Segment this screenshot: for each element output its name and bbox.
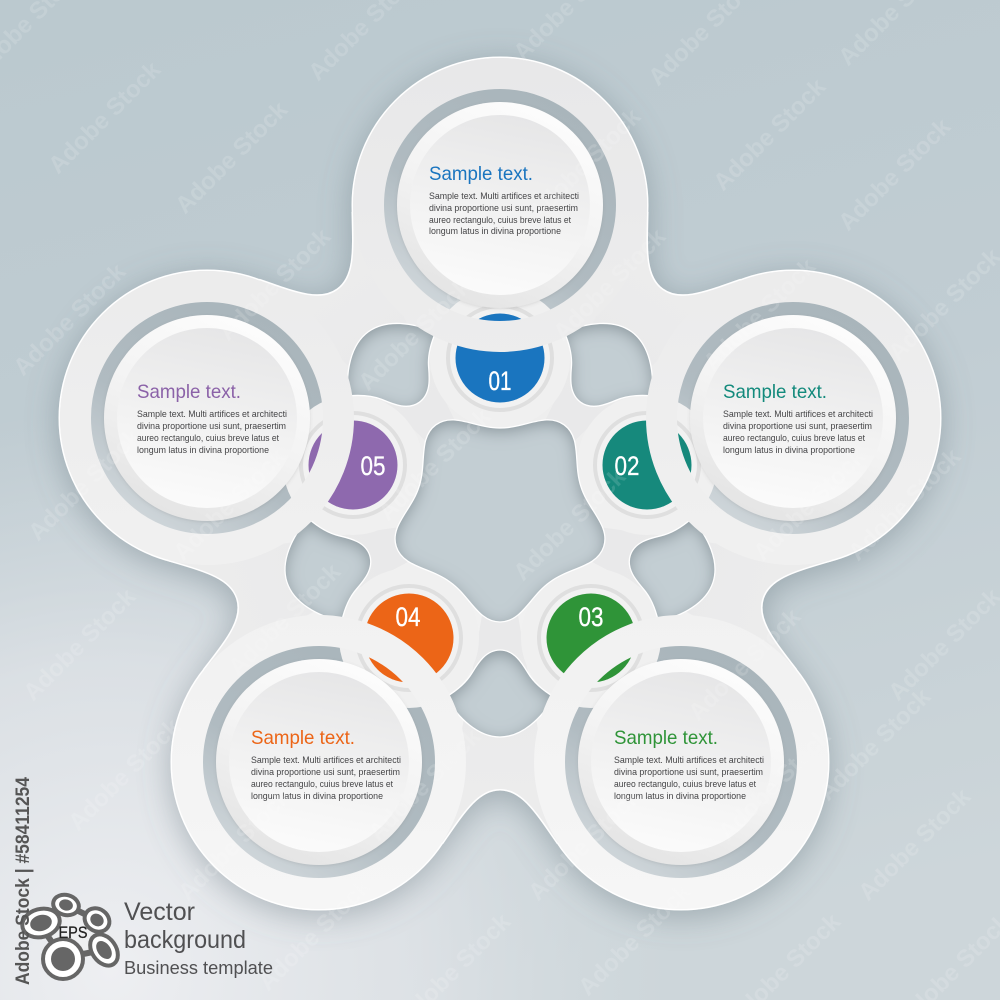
caption: vector background business template: Vector — [124, 898, 195, 926]
panel: step 5: Sample text. — [137, 381, 241, 403]
watermarks: Adobe Stock — [63, 713, 187, 836]
logo icon with EPS label: EPS — [58, 923, 88, 942]
logo icon with EPS label — [19, 892, 124, 979]
panel: step 4: Sample text. Multi artifices et architecti — [251, 755, 401, 765]
watermarks: Adobe Stock — [18, 583, 142, 706]
panel: step 5: longum latus in divina proportione — [137, 445, 269, 455]
watermarks: Adobe Stock — [843, 443, 967, 566]
watermarks: Adobe Stock — [170, 96, 294, 219]
panel: step 2: longum latus in divina proportione — [723, 445, 855, 455]
watermarks: Adobe Stock — [523, 103, 647, 226]
caption: vector background business template: Business template — [124, 957, 273, 978]
watermarks: Adobe Stock — [223, 558, 347, 681]
panel: step 1: Sample text. — [429, 163, 533, 185]
caption: vector background business template — [124, 898, 273, 978]
badge 01: 01 — [488, 366, 512, 396]
panel: step 3 — [550, 630, 812, 894]
panel: step 5: aureo rectangulo, cuius breve latus et — [137, 433, 279, 443]
badge 03 — [521, 568, 661, 708]
panel: step 1: divina proportione usi sunt, praesertim — [429, 203, 578, 213]
watermarks: Adobe Stock — [573, 878, 697, 1000]
panel: step 2: divina proportione usi sunt, praesertim — [723, 421, 872, 431]
central white shape — [60, 58, 940, 909]
watermarks: Adobe Stock — [683, 603, 807, 726]
panel: step 4: aureo rectangulo, cuius breve latus et — [251, 779, 393, 789]
watermarks: Adobe Stock — [23, 423, 147, 546]
watermarks: Adobe Stock — [173, 783, 297, 906]
panel: step 3: Sample text. — [614, 727, 718, 749]
badge 04 — [339, 568, 479, 708]
panel: step 3: divina proportione usi sunt, praesertim — [614, 767, 763, 777]
recessed grey rings — [90, 88, 910, 879]
panel: step 3: Sample text. Multi artifices et architecti — [614, 755, 764, 765]
watermarks: Adobe Stock — [698, 253, 822, 376]
watermarks: Adobe Stock — [833, 113, 957, 236]
panel: step 5: Sample text. Multi artifices et architecti — [137, 409, 287, 419]
panel: step 4: longum latus in divina proportione — [251, 791, 383, 801]
watermarks: Adobe Stock — [213, 223, 337, 346]
panel: step 3: longum latus in divina proportione — [614, 791, 746, 801]
panel: step 1 — [368, 74, 632, 336]
panel: step 1: aureo rectangulo, cuius breve latus et — [429, 215, 571, 225]
badge 02 — [577, 395, 717, 535]
badge 04: 04 — [396, 602, 420, 632]
watermarks: Adobe Stock — [508, 463, 632, 586]
watermarks: Adobe Stock — [363, 723, 487, 846]
panel: step 4: Sample text. — [251, 727, 355, 749]
panel: step 1: Sample text. Multi artifices et architecti — [429, 191, 579, 201]
watermarks: Adobe Stock — [43, 56, 167, 179]
panel: step 2 — [662, 286, 924, 550]
watermarks: Adobe Stock — [168, 443, 292, 566]
watermarks: Adobe Stock — [748, 443, 872, 566]
watermarks: Adobe Stock — [813, 683, 937, 806]
panel: step 4: divina proportione usi sunt, praesertim — [251, 767, 400, 777]
panel: step 2: aureo rectangulo, cuius breve latus et — [723, 433, 865, 443]
watermarks: Adobe Stock — [253, 873, 377, 996]
watermarks: Adobe Stock — [708, 73, 832, 196]
watermarks: Adobe Stock — [8, 258, 132, 381]
panel: step 3: aureo rectangulo, cuius breve latus et — [614, 779, 756, 789]
vertical stock id: Adobe Stock | #58411254 — [13, 777, 34, 985]
watermarks: Adobe Stock — [548, 223, 672, 346]
watermarks: Adobe Stock — [353, 273, 477, 396]
cut-out holes — [270, 300, 730, 737]
badge 05: 05 — [360, 451, 386, 481]
watermarks: Adobe Stock — [523, 783, 647, 906]
watermarks: Adobe Stock — [713, 723, 837, 846]
caption: vector background business template: background — [124, 926, 246, 954]
panel: step 4 — [188, 630, 450, 894]
badge 01 — [430, 288, 570, 428]
panel: step 2: Sample text. Multi artifices et architecti — [723, 409, 873, 419]
panel: step 1: longum latus in divina proportione — [429, 226, 561, 236]
badge 03: 03 — [578, 602, 604, 632]
watermarks: Adobe Stock — [373, 403, 497, 526]
panel: step 5: divina proportione usi sunt, praesertim — [137, 421, 286, 431]
panel: step 2: Sample text. — [723, 381, 827, 403]
watermarks: Adobe Stock — [853, 783, 977, 906]
panel: step 5 — [76, 286, 338, 550]
badge 02: 02 — [614, 451, 640, 481]
badge 05 — [283, 395, 423, 535]
